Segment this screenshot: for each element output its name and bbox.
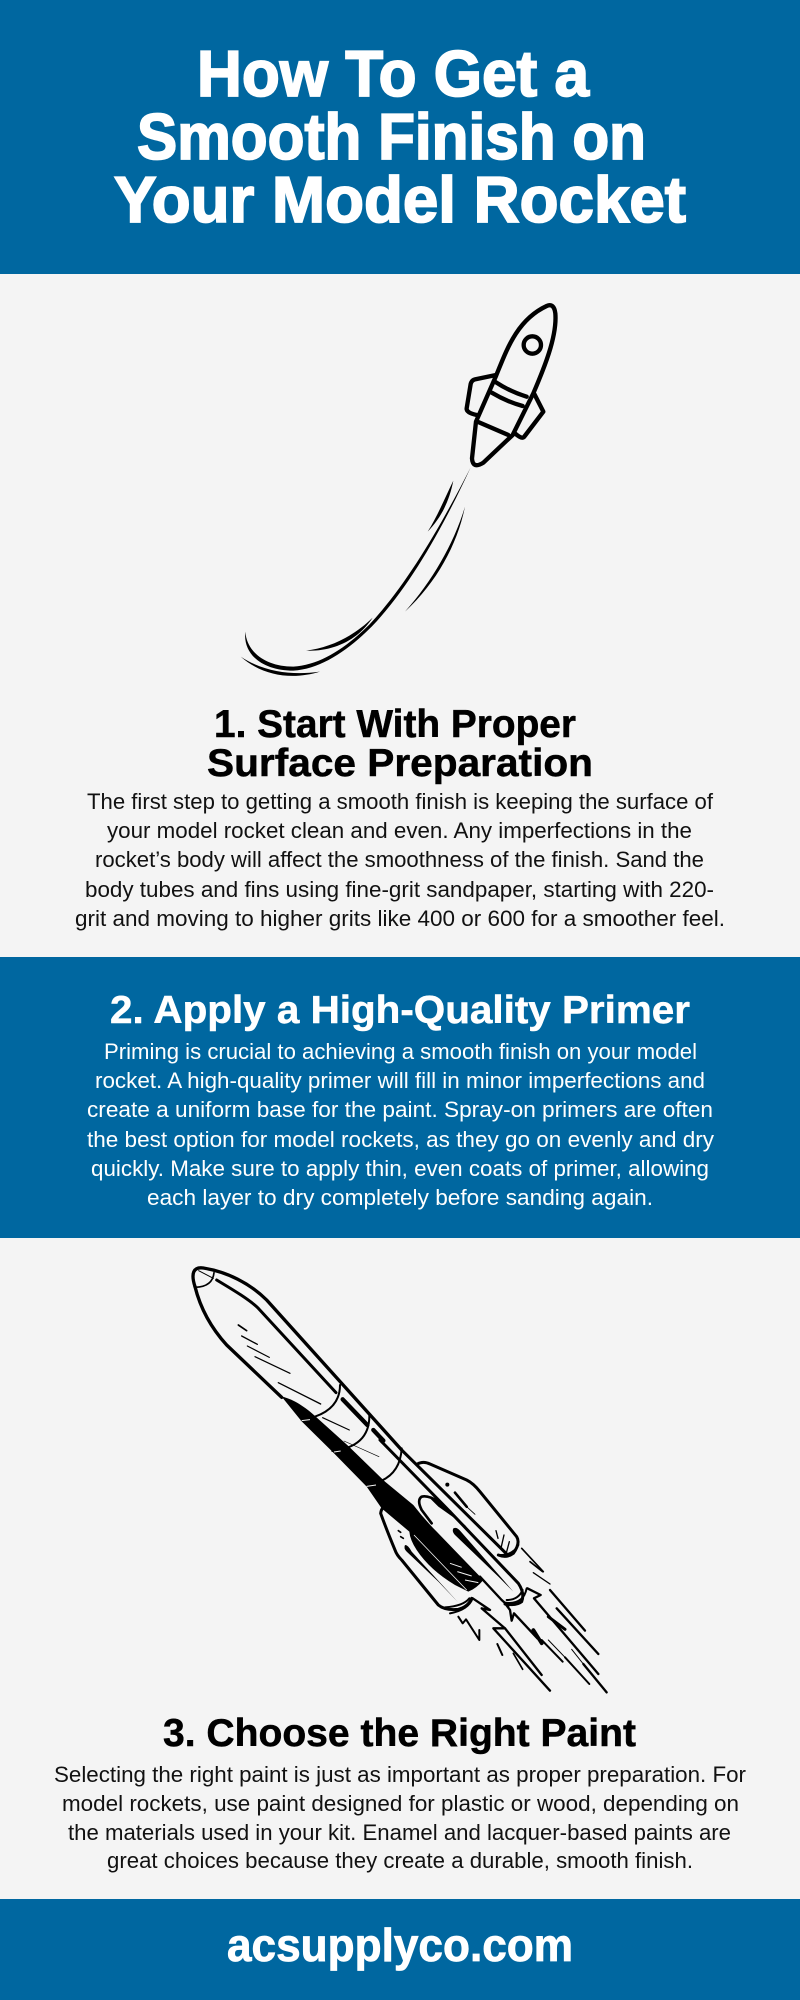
- title: Smooth Finish on: [137, 100, 646, 173]
- text: step 1 body: grit and moving to higher grits like 400 or 600 for a smoother feel.: [75, 906, 725, 931]
- panel: step 2: [0, 957, 800, 1238]
- icon: large rocket with boosters: [193, 1268, 607, 1692]
- text: step 2 body: [87, 1039, 714, 1210]
- title: How To Get a: [197, 37, 590, 110]
- panel: step 1: [75, 703, 725, 931]
- text: step 2 body: each layer to dry completely before sanding again.: [147, 1185, 653, 1210]
- text: step 1 body: rocket’s body will affect the smoothness of the finish. Sand the: [95, 847, 704, 872]
- text: step 3 body: [54, 1762, 746, 1873]
- text: step 2 body: Priming is crucial to achieving a smooth finish on your model: [104, 1039, 697, 1064]
- panel: footer: [0, 1899, 800, 2000]
- text: step 2 body: create a uniform base for the paint. Spray-on primers are often: [87, 1097, 713, 1122]
- heading: step 2: 2. Apply a High-Quality Primer: [110, 989, 690, 1032]
- panel: step 3: [54, 1712, 746, 1873]
- text: step 2 body: the best option for model rockets, as they go on evenly and dry: [87, 1127, 714, 1152]
- text: step 3 body: great choices because they create a durable, smooth finish.: [107, 1848, 693, 1873]
- text: step 2 body: rocket. A high-quality primer will fill in minor imperfections and: [95, 1068, 705, 1093]
- text: step 1 body: The first step to getting a smooth finish is keeping the surface of: [87, 789, 714, 814]
- text: step 1 body: [75, 789, 725, 931]
- text: step 3 body: the materials used in your kit. Enamel and lacquer-based paints are: [68, 1820, 731, 1845]
- text: step 2 body: quickly. Make sure to apply thin, even coats of primer, allowing: [91, 1156, 709, 1181]
- heading: step 3: 3. Choose the Right Paint: [163, 1712, 636, 1755]
- icon: small rocket with curved trail: [241, 305, 556, 676]
- text: step 3 body: model rockets, use paint designed for plastic or wood, depending on: [62, 1791, 739, 1816]
- title: Your Model Rocket: [114, 163, 686, 236]
- heading: step 1: 1. Start With Proper: [214, 703, 576, 746]
- footer website: acsupplyco.com: [227, 1919, 573, 1971]
- text: step 3 body: Selecting the right paint is just as important as proper preparation. For: [54, 1762, 746, 1787]
- title: [114, 37, 686, 236]
- heading: step 1: [207, 703, 593, 785]
- text: step 1 body: body tubes and fins using fine-grit sandpaper, starting with 220-: [85, 877, 714, 902]
- panel: header: [0, 0, 800, 274]
- heading: step 1: Surface Preparation: [207, 742, 593, 785]
- text: step 1 body: your model rocket clean and even. Any imperfections in the: [107, 818, 692, 843]
